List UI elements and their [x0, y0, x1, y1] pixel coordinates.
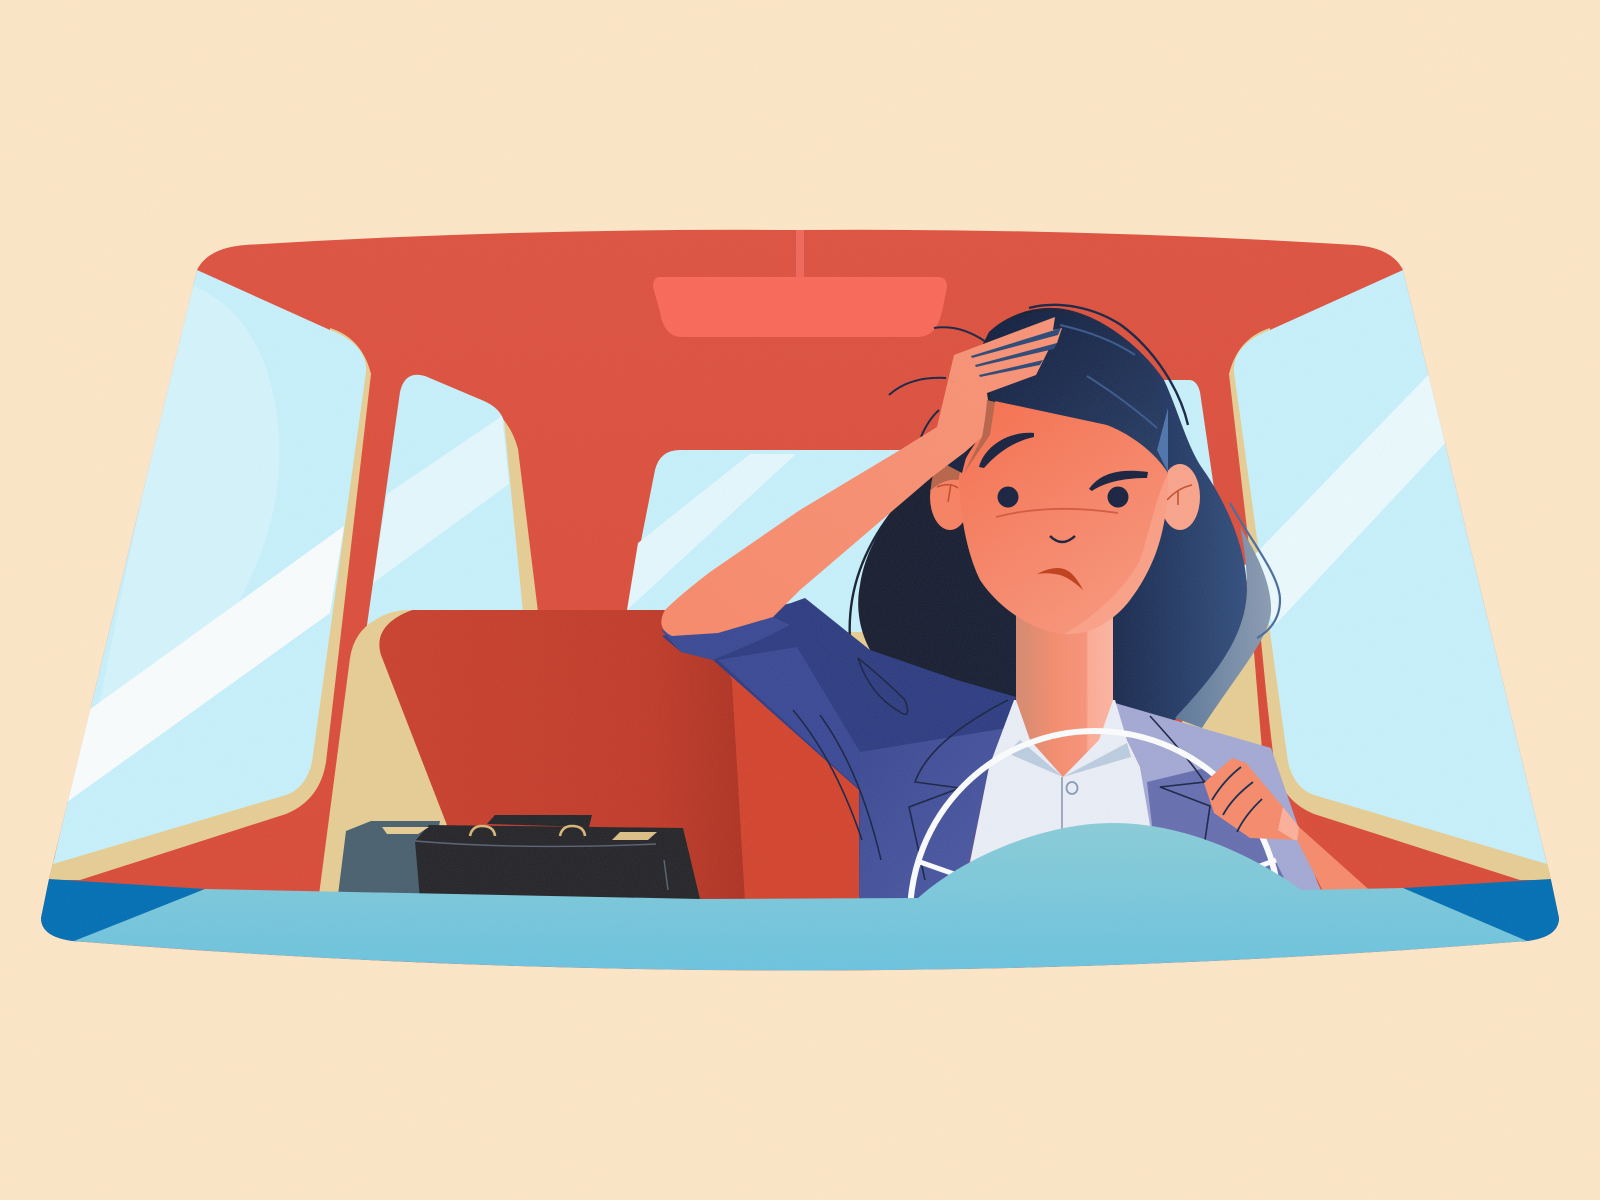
strand left: [850, 506, 897, 640]
hair lock wedge: [1157, 408, 1168, 472]
woman: [661, 305, 1375, 1101]
wrist highlight: [1278, 807, 1299, 842]
wheel rim: [910, 731, 1280, 1101]
shirt placket: [1061, 777, 1063, 835]
flyaway hairs: [889, 327, 986, 437]
jacket right side: [1115, 703, 1320, 892]
interior roof: [30, 220, 1570, 990]
left window reflection arc: [98, 285, 280, 710]
wheel spoke left: [920, 862, 954, 874]
steering wheel: [910, 731, 1280, 1101]
rear left window glass: [366, 375, 523, 632]
mouth: [1037, 568, 1083, 590]
left ear: [930, 464, 970, 530]
face: [959, 400, 1168, 634]
shirt button: [1066, 782, 1078, 794]
briefcase buckle right: [560, 826, 585, 836]
passenger seat red: [379, 610, 745, 900]
driver seat edge: [841, 632, 1000, 700]
hand on wheel: [1204, 758, 1375, 895]
rear window glare: [627, 454, 796, 610]
rear left window frame: [504, 420, 538, 610]
right ear: [1160, 464, 1200, 530]
finger lines: [1212, 767, 1262, 832]
rear left window: [366, 375, 538, 632]
jacket lower lit panel: [859, 728, 1007, 900]
headrest shadow: [1175, 527, 1271, 728]
right ear lines: [1167, 485, 1192, 505]
left side window: [49, 270, 371, 880]
nose crease: [996, 509, 1118, 517]
right blue corner: [1403, 879, 1570, 945]
passenger seat side: [700, 610, 862, 900]
briefcase seam: [415, 841, 668, 890]
rear-view mirror: [653, 230, 947, 337]
wheel spoke right: [1260, 860, 1276, 866]
rear left window glare: [373, 416, 509, 583]
right window frame: [1229, 328, 1551, 880]
right eyebrow: [1089, 471, 1148, 491]
nose: [1050, 536, 1075, 542]
right window glare: [1240, 369, 1449, 625]
briefcase handle: [487, 815, 592, 827]
passenger seat beige side: [319, 610, 480, 900]
rear window glass: [627, 450, 900, 632]
driver seat right beige: [1180, 640, 1269, 760]
briefcase buckle left: [470, 826, 495, 836]
shirt: [970, 700, 1156, 880]
left ear shade: [931, 464, 965, 490]
mirror body: [653, 277, 947, 337]
briefcase rear: [338, 821, 440, 895]
left window frame: [49, 328, 371, 880]
right window glass: [1234, 270, 1547, 864]
right side window: [1229, 270, 1551, 880]
strand right: [1230, 503, 1280, 638]
rear centre window: [627, 450, 900, 632]
briefcase body: [415, 825, 700, 899]
briefcase tag right: [612, 832, 657, 840]
hair wedge by left ear: [943, 450, 968, 473]
collar shadow left: [1007, 740, 1063, 777]
briefcase: [338, 815, 700, 899]
hand shadow on forehead: [964, 400, 995, 473]
illustration: stressed woman driving, seen through windshield: [41, 230, 1559, 970]
face side highlight: [1064, 473, 1168, 634]
jacket right creases: [1150, 716, 1210, 840]
hair highlights: [1060, 325, 1157, 428]
hair top: [989, 312, 1168, 473]
dashboard corners: [30, 879, 1570, 945]
hair back: [858, 308, 1247, 760]
neck: [1016, 610, 1113, 777]
collar shadow right: [1063, 743, 1131, 777]
sleeve lit facet: [718, 647, 860, 790]
left eyebrow: [979, 433, 1034, 468]
cuff: [661, 617, 790, 660]
right red pillar: [1253, 640, 1272, 752]
strand top: [1029, 305, 1188, 425]
jacket creases: [793, 658, 1008, 880]
left window white glare: [67, 526, 344, 802]
right cuff: [1278, 840, 1322, 892]
car interior and windshield: [41, 230, 1559, 970]
dashboard with steering hump: [74, 823, 1527, 970]
left ear lines: [937, 484, 958, 502]
left blue corner: [30, 879, 205, 945]
finger gaps: [971, 328, 1061, 377]
jacket right lapel shade: [1147, 768, 1285, 890]
rear right window sliver: [1160, 380, 1215, 495]
right eye: [1108, 486, 1128, 508]
briefcase tag left: [382, 827, 429, 834]
left window glass: [53, 270, 366, 864]
jacket left side: [662, 598, 1016, 900]
raised arm and hand: [661, 317, 1062, 636]
mirror stem: [796, 230, 804, 278]
left eye: [998, 486, 1018, 508]
